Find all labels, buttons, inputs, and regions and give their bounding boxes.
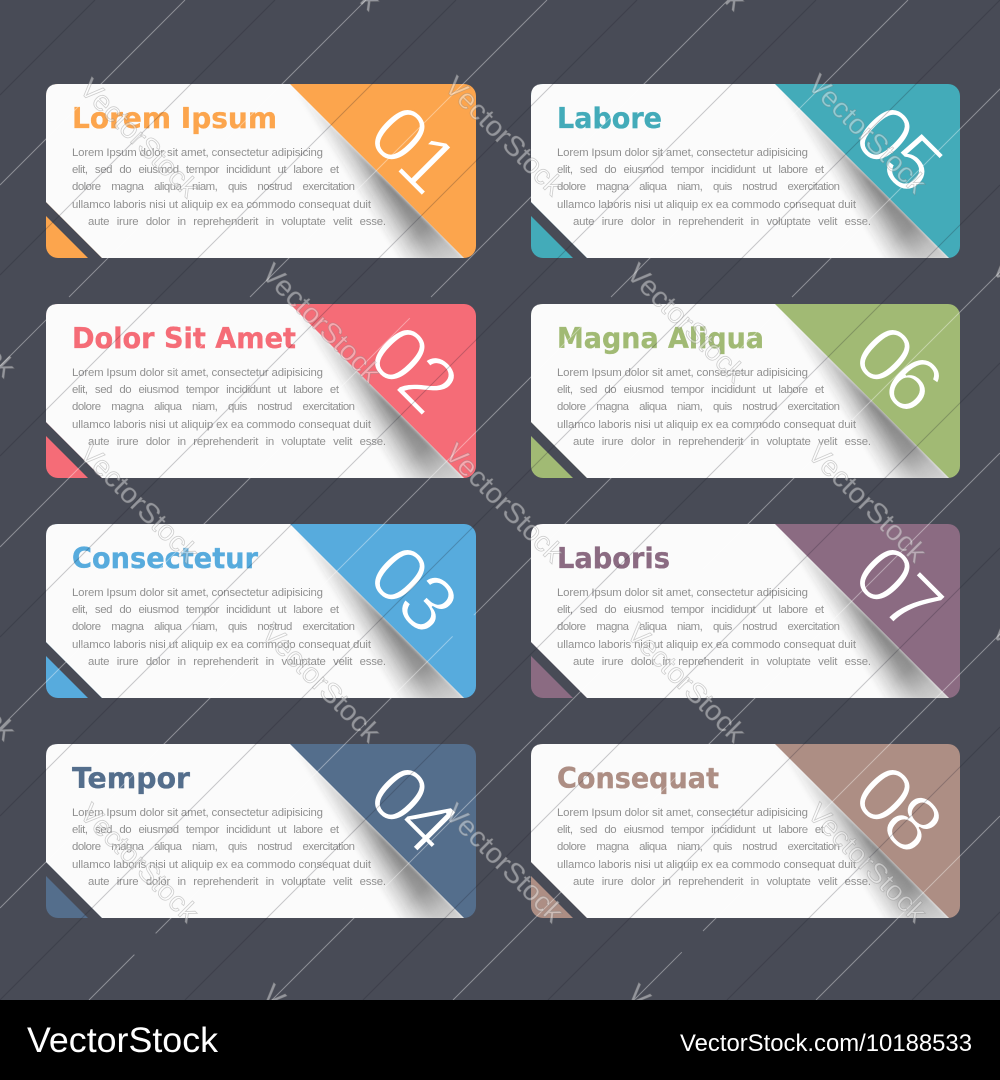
body text 08: Lorem Ipsum dolor sit amet, consectetur adipisicing [557,807,808,819]
number 07: 07 [837,528,958,648]
watermarks: VectorStock [439,70,570,202]
panel: 06 Magna Aliqua [531,304,960,480]
body text 03: Lorem Ipsum dolor sit amet, consectetur adipisicing [72,587,323,599]
watermarks: VectorStock [256,617,387,749]
colour base 03 [46,524,476,698]
body text 01 [72,147,386,228]
body text 02: dolore magna aliqua niam, quis nostrud exercitation [72,401,355,413]
body text 07 [557,587,871,668]
fold shadow 04 [306,762,464,918]
body text 04: aute irure dolor in reprehenderit in voluptate velit esse. [88,876,386,888]
body text 07: aute irure dolor in reprehenderit in voluptate velit esse. [573,656,871,668]
body text 02: aute irure dolor in reprehenderit in voluptate velit esse. [88,436,386,448]
body text 01: dolore magna aliqua niam, quis nostrud exercitation [72,181,355,193]
body text 04: dolore magna aliqua niam, quis nostrud exercitation [72,841,355,853]
watermarks: VectorStock [802,437,933,569]
panel: 03 Consectetur [46,524,476,700]
fold shadow 01 [306,102,464,258]
body text 04: elit, sed do eiusmod tempor incididunt ut labore et [72,824,340,836]
body text 02: Lorem Ipsum dolor sit amet, consectetur adipisicing [72,367,323,379]
fold shadow 02 [306,322,464,478]
heading 08: Consequat [557,762,719,795]
body text 08 [557,807,871,888]
watermarks: VectorStock [74,72,205,204]
body text 03: dolore magna aliqua niam, quis nostrud exercitation [72,621,355,633]
body text 04: ullamco laboris nisi ut aliquip ex ea commodo consequat duit [72,859,372,871]
corner band 07 [531,642,587,698]
body text 05: ullamco laboris nisi ut aliquip ex ea commodo consequat duit [557,199,857,211]
corner band 04 [46,862,102,918]
body text 01: elit, sed do eiusmod tempor incididunt ut labore et [72,164,340,176]
corner band 08 [531,862,587,918]
corner band 01 [46,202,102,258]
colour base 07 [531,524,960,698]
panel: 01 Lorem Ipsum [46,84,476,260]
number 02: 02 [352,308,473,428]
fold shadow 05 [790,102,948,258]
body text 03: aute irure dolor in reprehenderit in voluptate velit esse. [88,656,386,668]
watermarks: VectorStock [621,257,752,389]
heading 06: Magna Aliqua [557,322,764,355]
body text 06: dolore magna aliqua niam, quis nostrud exercitation [557,401,840,413]
body text 02: elit, sed do eiusmod tempor incididunt ut labore et [72,384,340,396]
body text 06: ullamco laboris nisi ut aliquip ex ea commodo consequat duit [557,419,857,431]
body text 05: dolore magna aliqua niam, quis nostrud exercitation [557,181,840,193]
fold shadow 07 [790,542,948,698]
body text 03 [72,587,386,668]
footer logo: VectorStock [27,1021,219,1060]
footer url: VectorStock.com/10188533 [680,1030,972,1057]
watermarks: VectorStock [74,797,205,929]
white sheet 03 [46,524,464,698]
body text 02: ullamco laboris nisi ut aliquip ex ea commodo consequat duit [72,419,372,431]
watermarks: VectorStock [802,68,933,200]
body text 08: dolore magna aliqua niam, quis nostrud exercitation [557,841,840,853]
colour base 04 [46,744,476,918]
watermarks: VectorStock [439,437,570,569]
body text 07: dolore magna aliqua niam, quis nostrud exercitation [557,621,840,633]
panel: 07 Laboris [531,524,960,700]
number 03: 03 [352,528,473,648]
body text 04: Lorem Ipsum dolor sit amet, consectetur adipisicing [72,807,323,819]
body text 08: aute irure dolor in reprehenderit in voluptate velit esse. [573,876,871,888]
body text 04 [72,807,386,888]
corner band 05 [531,202,587,258]
body text 07: ullamco laboris nisi ut aliquip ex ea commodo consequat duit [557,639,857,651]
number 04: 04 [352,748,474,870]
panel: 02 Dolor Sit Amet [46,304,476,480]
white sheet 04 [46,744,464,918]
body text 05 [557,147,871,228]
panel: 04 Tempor [46,744,476,920]
heading 01: Lorem Ipsum [72,102,277,135]
body text 06: aute irure dolor in reprehenderit in voluptate velit esse. [573,436,871,448]
white sheet 08 [531,744,949,918]
body text 02 [72,367,386,448]
fold shadow 08 [790,762,948,918]
body text 08: ullamco laboris nisi ut aliquip ex ea commodo consequat duit [557,859,857,871]
watermarks: VectorStock [802,797,933,929]
number 08: 08 [837,748,959,869]
number 01: 01 [352,88,473,208]
fold shadow 06 [790,322,948,478]
body text 01: Lorem Ipsum dolor sit amet, consectetur adipisicing [72,147,323,159]
body text 05: aute irure dolor in reprehenderit in voluptate velit esse. [573,216,871,228]
body text 07: elit, sed do eiusmod tempor incididunt ut labore et [557,604,825,616]
body text 06: elit, sed do eiusmod tempor incididunt ut labore et [557,384,825,396]
heading 03: Consectetur [72,542,258,575]
colour base 06 [531,304,960,478]
body text 07: Lorem Ipsum dolor sit amet, consectetur adipisicing [557,587,808,599]
body text 08: elit, sed do eiusmod tempor incididunt ut labore et [557,824,825,836]
body text 03: elit, sed do eiusmod tempor incididunt ut labore et [72,604,340,616]
heading 04: Tempor [72,762,190,795]
corner band 02 [46,422,102,478]
watermarks: VectorStock [439,797,570,929]
colour base 01 [46,84,476,258]
body text 01: aute irure dolor in reprehenderit in voluptate velit esse. [88,216,386,228]
heading 07: Laboris [557,542,670,575]
panel: 08 Consequat [531,744,960,920]
white sheet 07 [531,524,949,698]
colour base 02 [46,304,476,478]
body text 05: elit, sed do eiusmod tempor incididunt ut labore et [557,164,825,176]
colour base 05 [531,84,960,258]
white sheet 02 [46,304,464,478]
white sheet 05 [531,84,949,258]
heading 02: Dolor Sit Amet [72,322,296,355]
body text 03: ullamco laboris nisi ut aliquip ex ea commodo consequat duit [72,639,372,651]
body text 05: Lorem Ipsum dolor sit amet, consectetur adipisicing [557,147,808,159]
corner band 03 [46,642,102,698]
heading 05: Labore [557,102,662,135]
body text 06 [557,367,871,448]
watermarks: VectorStock [74,437,205,569]
body text 01: ullamco laboris nisi ut aliquip ex ea commodo consequat duit [72,199,372,211]
colour base 08 [531,744,960,918]
fold shadow 03 [306,542,464,698]
corner band 06 [531,422,587,478]
watermarks: VectorStock [256,257,387,389]
watermarks: VectorStock [621,617,752,749]
number 05: 05 [837,88,959,209]
body text 06: Lorem Ipsum dolor sit amet, consectetur adipisicing [557,367,808,379]
footer bar [0,1000,1000,1080]
white sheet 01 [46,84,464,258]
white sheet 06 [531,304,949,478]
number 06: 06 [837,308,958,428]
panel: 05 Labore [531,84,960,260]
